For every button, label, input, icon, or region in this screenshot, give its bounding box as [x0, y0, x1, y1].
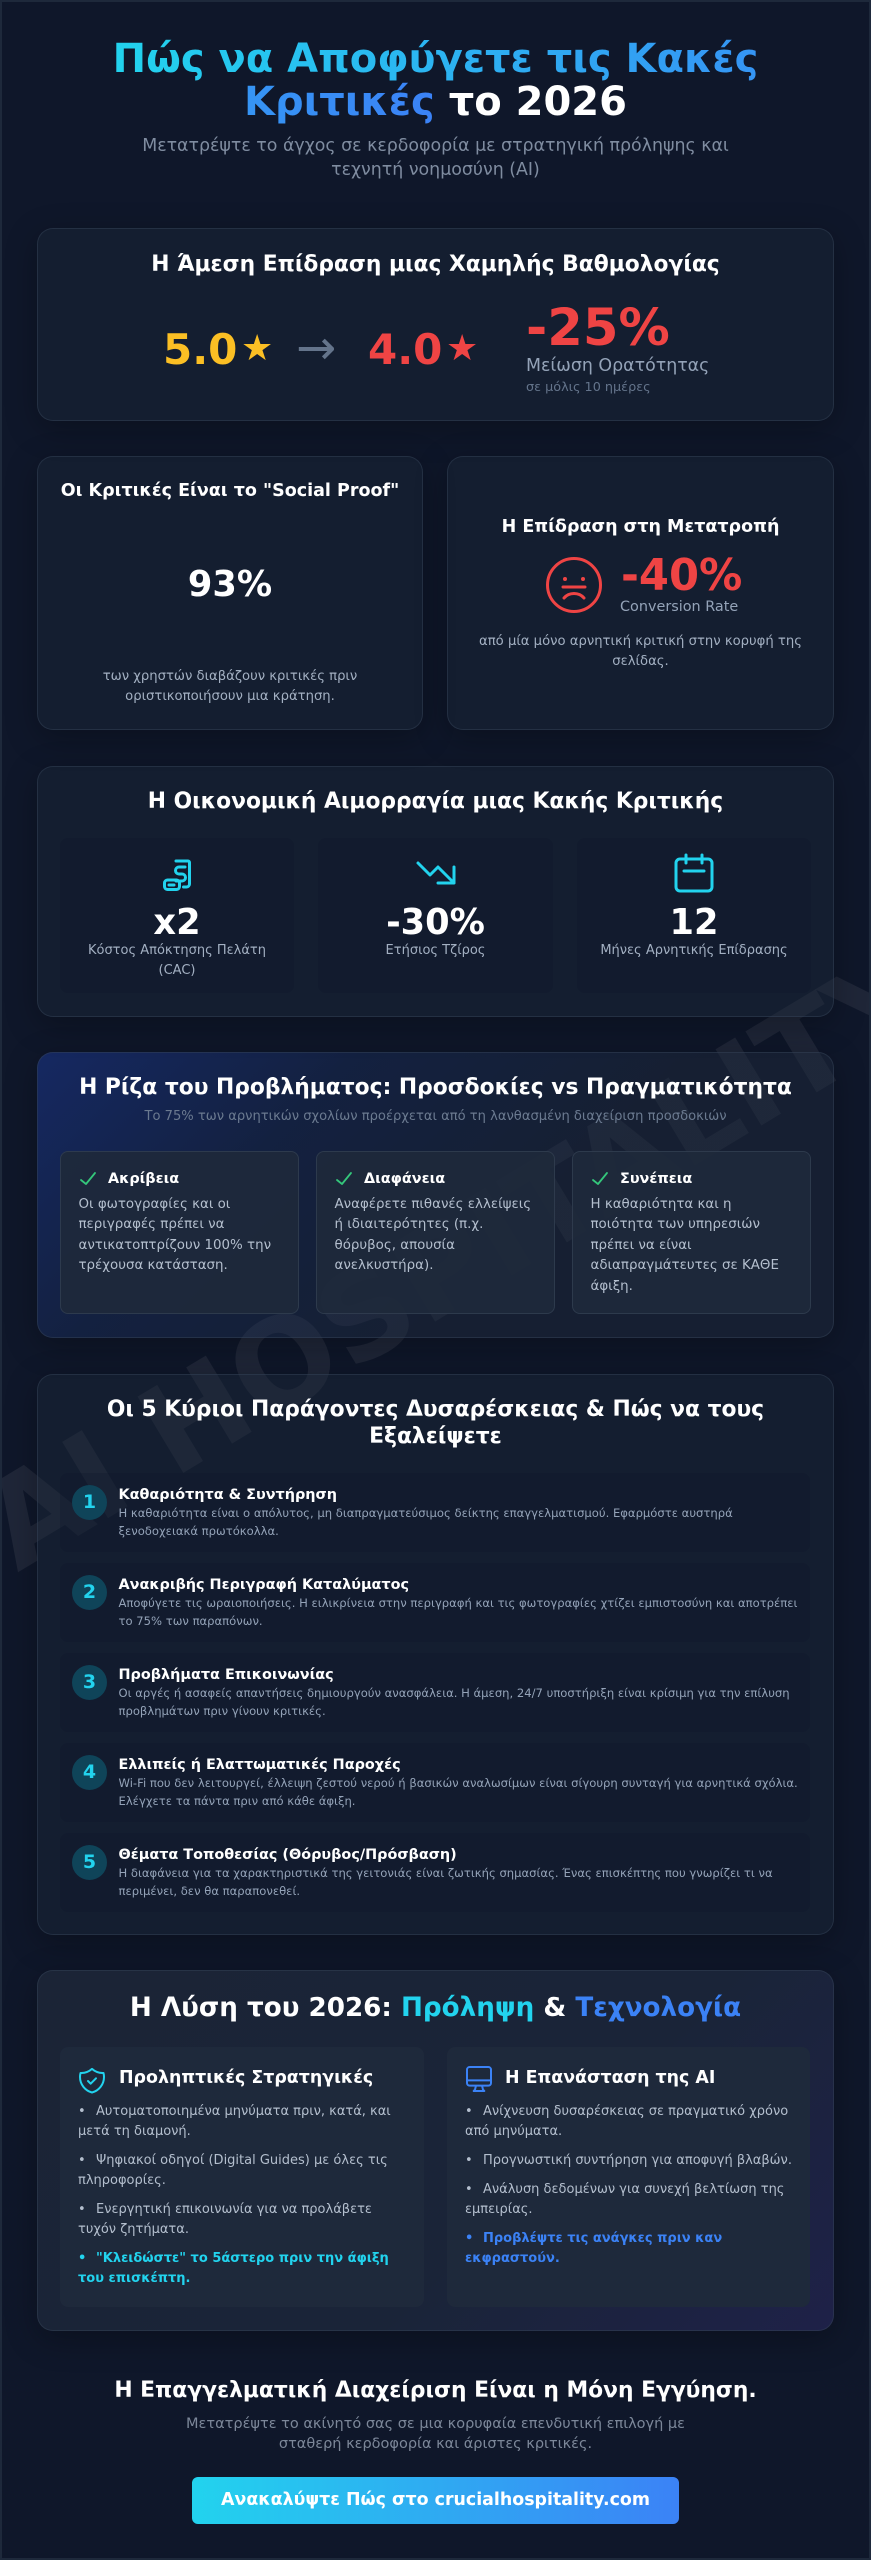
card: transparency	[316, 1151, 555, 1314]
text	[78, 1197, 271, 1273]
value: 12	[670, 902, 718, 943]
panel: financial bleed	[37, 766, 834, 1017]
bullet: μετά τη διαμονή.	[78, 2124, 191, 2139]
factor text	[118, 1506, 733, 1538]
subtitle: τεχνητή νοημοσύνη (AI)	[331, 160, 540, 180]
label: Μήνες Αρνητικής Επίδρασης	[600, 943, 788, 958]
card: AI revolution	[447, 2047, 810, 2307]
bullet: Προγνωστική συντήρηση για αποφυγή βλαβών.	[483, 2153, 792, 2168]
factor text: Η διαφάνεια για τα χαρακτηριστικά της γειτονιάς είναι ζωτικής σημασίας. Ένας επισκέπτης που γνωρίζει τι να	[118, 1866, 773, 1880]
bullet: τυχόν ζητήματα.	[78, 2222, 189, 2237]
heading: Ακρίβεια	[108, 1171, 179, 1187]
bullet	[78, 2153, 388, 2188]
factor text: Οι αργές ή ασαφείς απαντήσεις δημιουργούν ανασφάλεια. Η άμεση, 24/7 υποστήριξη είναι κρίσιμη για την επίλυση	[118, 1686, 790, 1700]
call to action button: Ανακαλύψτε Πώς στο crucialhospitality.com	[221, 2490, 650, 2510]
factor 3	[60, 1653, 810, 1732]
factor text: προβλημάτων πριν γίνουν κριτικές.	[118, 1704, 326, 1718]
number 4: 4	[83, 1761, 96, 1783]
description: οριστικοποιήσουν μια κράτηση.	[125, 689, 335, 704]
factor title: Προβλήματα Επικοινωνίας	[118, 1667, 334, 1683]
heading: Προληπτικές Στρατηγικές	[119, 2068, 373, 2088]
heading: Οι Κριτικές Είναι το "Social Proof"	[61, 481, 399, 501]
rating before: 5.0	[163, 325, 237, 374]
bullet: highlight: Προβλέψτε τις ανάγκες πριν καν	[483, 2231, 722, 2246]
bullet: Αυτοματοποιημένα μηνύματα πριν, κατά, και	[96, 2104, 391, 2119]
heading: Η Επίδραση στη Μετατροπή	[502, 517, 779, 537]
number 5	[72, 1845, 107, 1880]
bullet	[465, 2104, 788, 2139]
bullet: πληροφορίες.	[78, 2173, 166, 2188]
text	[590, 1197, 779, 1294]
card: proactive strategies	[60, 2047, 424, 2307]
label	[88, 943, 266, 978]
panel: five factors	[37, 1374, 834, 1935]
factor text: ξενοδοχειακά πρωτόκολλα.	[118, 1524, 279, 1538]
factor text: Αποφύγετε τις ωραιοποιήσεις. Η ειλικρίνεια στην περιγραφή και τις φωτογραφίες χτίζει εμπιστοσύνη και αποτρέπει	[118, 1596, 797, 1610]
subtitle: Μετατρέψτε το άγχος σε κερδοφορία με στρατηγική πρόληψης και	[142, 136, 729, 156]
bullet: Ανίχνευση δυσαρέσκειας σε πραγματικό χρόνο	[483, 2104, 788, 2119]
icon: check	[592, 1172, 608, 1185]
closing text: σταθερή κερδοφορία και άριστες κριτικές.	[279, 2436, 592, 2452]
icon: trending down	[416, 861, 456, 885]
factor 1	[60, 1473, 810, 1552]
intro text: Το 75% των αρνητικών σχολίων προέρχεται από τη λανθασμένη διαχείριση προσδοκιών	[144, 1109, 727, 1124]
bullet: highlight: "Κλειδώστε" το 5άστερο πριν την άφιξη	[96, 2251, 389, 2266]
description: από μία μόνο αρνητική κριτική στην κορυφή της	[479, 634, 802, 649]
text: ανελκυστήρα).	[334, 1258, 433, 1273]
number 3: 3	[83, 1671, 96, 1693]
text: Αναφέρετε πιθανές ελλείψεις	[334, 1197, 531, 1212]
rating after: 4.0	[368, 325, 442, 374]
value: x2	[153, 902, 201, 943]
text	[334, 1197, 531, 1273]
icon: sad face	[546, 557, 602, 613]
panel: social proof	[37, 456, 423, 730]
bullet: •	[465, 2153, 473, 2168]
factor text	[118, 1776, 798, 1808]
icon: check	[80, 1172, 96, 1185]
text: αντικατοπτρίζουν 100% την	[78, 1238, 271, 1253]
metric: revenue	[318, 838, 553, 993]
factor title: Θέματα Τοποθεσίας (Θόρυβος/Πρόσβαση)	[118, 1847, 457, 1863]
stat: 93%: 93%	[188, 564, 272, 605]
bullet list	[465, 2104, 792, 2266]
factor text: Wi-Fi που δεν λειτουργεί, έλλειψη ζεστού νερού ή βασικών αναλωσίμων είναι σίγουρη συνταγή για αρνητικά σχόλια.	[118, 1776, 798, 1790]
label: Ετήσιος Τζίρος	[386, 943, 485, 958]
factor text	[118, 1866, 773, 1898]
panel: conversion impact	[447, 456, 834, 730]
text: ή ιδιαιτερότητες (π.χ.	[334, 1217, 483, 1232]
heading: Η Επανάσταση της AI	[505, 2068, 715, 2088]
title: Πώς να Αποφύγετε τις Κακές	[113, 36, 758, 82]
factor 5	[60, 1833, 810, 1912]
factor 4	[60, 1743, 810, 1822]
factor title: Καθαριότητα & Συντήρηση	[118, 1487, 337, 1503]
bullet: •	[78, 2104, 86, 2119]
icon: red star: ★	[446, 328, 478, 369]
bullet: Ανάλυση δεδομένων για συνεχή βελτίωση της	[483, 2182, 784, 2197]
stat note: σε μόλις 10 ημέρες	[526, 380, 651, 395]
bullet: highlight: •	[465, 2231, 473, 2246]
closing heading: Η Επαγγελματική Διαχείριση Είναι η Μόνη Εγγύηση.	[114, 2378, 757, 2403]
bullet: highlight: εκφραστούν.	[465, 2251, 560, 2266]
icon: check	[336, 1172, 352, 1185]
heading: Η Οικονομική Αιμορραγία μιας Κακής Κριτικής	[148, 789, 723, 814]
bullet: highlight	[465, 2231, 722, 2266]
bullet	[465, 2182, 784, 2217]
panel: 2026 solution	[37, 1970, 834, 2331]
bullet: εμπειρίας.	[465, 2202, 533, 2217]
bullet: Ψηφιακοί οδηγοί (Digital Guides) με όλες τις	[96, 2153, 388, 2168]
bullet: από μηνύματα.	[465, 2124, 562, 2139]
icon: desktop	[466, 2066, 492, 2092]
description	[479, 634, 802, 669]
heading: Η Ρίζα του Προβλήματος: Προσδοκίες vs Πραγματικότητα	[79, 1075, 792, 1100]
stat: visibility drop: -25%	[526, 298, 670, 358]
text: περιγραφές πρέπει να	[78, 1217, 224, 1232]
label: (CAC)	[159, 963, 195, 978]
heading	[107, 1397, 764, 1449]
subtitle	[142, 136, 729, 180]
bullet: •	[78, 2202, 86, 2217]
label: Κόστος Απόκτησης Πελάτη	[88, 943, 266, 958]
icon: shield check	[79, 2068, 105, 2094]
heading: Η Λύση του 2026: Πρόληψη & Τεχνολογία	[130, 1993, 741, 2023]
icon: cost	[163, 860, 191, 891]
text: Οι φωτογραφίες και οι	[78, 1197, 230, 1212]
arrow: →	[296, 320, 336, 376]
text: θόρυβος, απουσία	[334, 1238, 455, 1253]
number 3	[72, 1665, 107, 1700]
text: άφιξη.	[590, 1279, 633, 1294]
number 2: 2	[83, 1581, 96, 1603]
card: consistency	[572, 1151, 811, 1314]
description	[103, 669, 357, 704]
text: αδιαπραγμάτευτες σε ΚΑΘΕ	[590, 1258, 779, 1273]
bullet: highlight: του επισκέπτη.	[78, 2271, 190, 2286]
number 2	[72, 1575, 107, 1610]
bullet: •	[78, 2153, 86, 2168]
closing text	[186, 2416, 685, 2452]
heading: Διαφάνεια	[364, 1171, 445, 1187]
factor text	[118, 1596, 797, 1628]
stat label: Μείωση Ορατότητας	[526, 356, 709, 376]
number 4	[72, 1755, 107, 1790]
bullet: •	[465, 2104, 473, 2119]
heading: Η Άμεση Επίδραση μιας Χαμηλής Βαθμολογίας	[151, 252, 720, 277]
card: accuracy	[60, 1151, 299, 1314]
metric: CAC	[60, 838, 294, 993]
icon: calendar	[674, 854, 714, 892]
bullet: Ενεργητική επικοινωνία για να προλάβετε	[96, 2202, 372, 2217]
closing text: Μετατρέψτε το ακίνητό σας σε μια κορυφαία επενδυτική επιλογή με	[186, 2416, 685, 2432]
factor title: Ανακριβής Περιγραφή Καταλύματος	[118, 1577, 409, 1593]
call to action button	[192, 2477, 679, 2524]
text: Η καθαριότητα και η	[590, 1197, 731, 1212]
description: σελίδας.	[612, 654, 669, 669]
factor 2	[60, 1563, 810, 1642]
factor text: το 75% των παραπόνων.	[118, 1614, 263, 1628]
bullet	[78, 2202, 372, 2237]
factor text: Η καθαριότητα είναι ο απόλυτος, μη διαπραγματεύσιμος δείκτης επαγγελματισμού. Εφαρμόστε αυστηρά	[118, 1506, 733, 1520]
factor text: Ελέγχετε τα πάντα πριν από κάθε άφιξη.	[118, 1794, 355, 1808]
metric: months	[577, 838, 811, 993]
factor title: Ελλιπείς ή Ελαττωματικές Παροχές	[118, 1757, 401, 1773]
factor text: περιμένει, δεν θα παραπονεθεί.	[118, 1884, 300, 1898]
panel: root of the problem	[37, 1052, 834, 1338]
heading: Εξαλείψετε	[369, 1424, 502, 1449]
number 1	[72, 1485, 107, 1520]
bullet: •	[465, 2182, 473, 2197]
description: των χρηστών διαβάζουν κριτικές πριν	[103, 669, 357, 684]
title	[113, 36, 758, 125]
stat label: Conversion Rate	[620, 599, 738, 615]
text: ποιότητα των υπηρεσιών	[590, 1217, 760, 1232]
bullet list	[78, 2104, 391, 2286]
icon: gold star: ★	[241, 328, 273, 369]
bullet	[78, 2104, 391, 2139]
bullet: highlight: •	[78, 2251, 86, 2266]
heading: Συνέπεια	[620, 1171, 692, 1187]
panel: immediate impact	[37, 228, 834, 421]
stat: -40%: -40%	[621, 551, 742, 601]
heading: Οι 5 Κύριοι Παράγοντες Δυσαρέσκειας & Πώς να τους	[107, 1397, 764, 1422]
title: Κριτικές το 2026	[244, 79, 627, 125]
factor text	[118, 1686, 790, 1718]
text: τρέχουσα κατάσταση.	[78, 1258, 228, 1273]
text: πρέπει να είναι	[590, 1238, 692, 1253]
number 5: 5	[83, 1851, 96, 1873]
number 1: 1	[83, 1491, 96, 1513]
bullet: highlight	[78, 2251, 389, 2286]
value: -30%	[386, 902, 485, 943]
